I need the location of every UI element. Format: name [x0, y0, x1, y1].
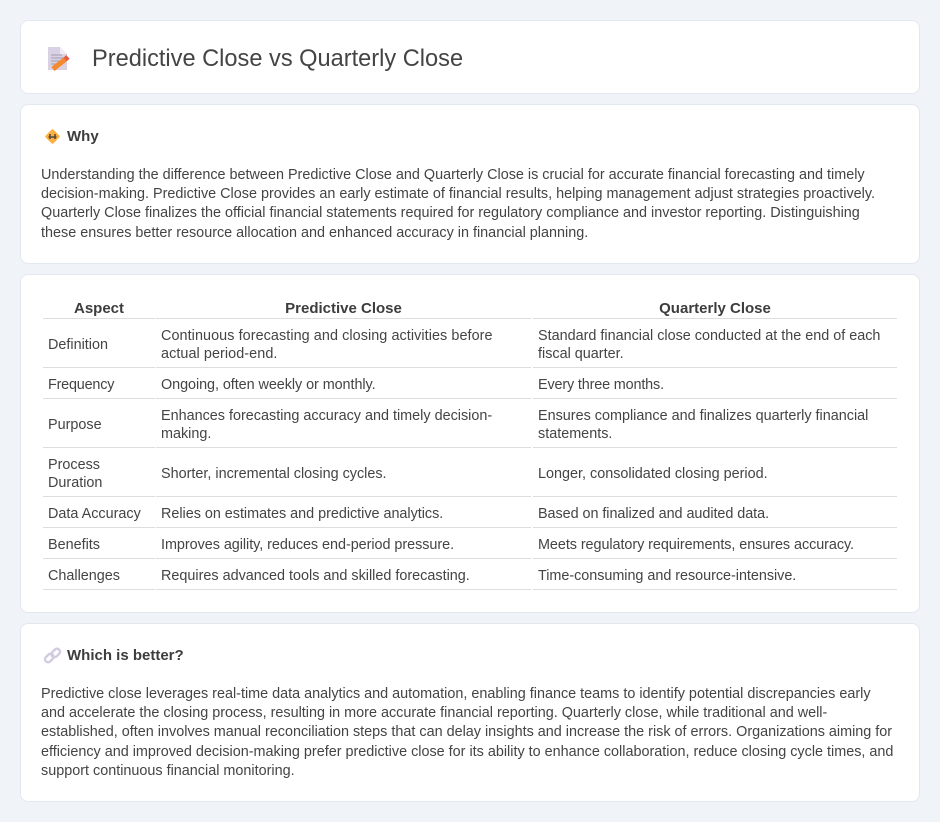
panel: comparison table	[20, 274, 920, 613]
icon: chain link	[44, 648, 62, 664]
panel: why	[20, 104, 920, 264]
row: challenges: Challenges	[48, 568, 120, 584]
table header: Predictive Close	[285, 300, 402, 317]
which is better paragraph: and accelerate the closing process, resulting in more accurate financial reporting. Quarterly close, while traditional and well-	[41, 705, 827, 721]
row: benefits: Meets regulatory requirements, ensures accuracy.	[538, 537, 854, 553]
why paragraph: Understanding the difference between Predictive Close and Quarterly Close is crucial for accurate financial forecasting and timely	[41, 166, 865, 182]
row: definition: Continuous forecasting and closing activities before	[161, 328, 493, 344]
row: data accuracy: Based on finalized and audited data.	[538, 506, 769, 522]
row: challenges: Requires advanced tools and skilled forecasting.	[161, 568, 470, 584]
row: process duration	[48, 457, 768, 491]
row: definition: Definition	[48, 337, 108, 353]
which is better paragraph: support continuous financial monitoring.	[41, 763, 295, 779]
row: frequency: Every three months.	[538, 377, 664, 393]
row: benefits: Benefits	[48, 537, 100, 553]
row: purpose	[48, 408, 868, 442]
row: process duration: Longer, consolidated closing period.	[538, 466, 768, 482]
row: definition: fiscal quarter.	[538, 346, 624, 362]
panel: title header	[20, 20, 920, 94]
which is better paragraph: established, often involves manual reconciliation steps that can delay insights and increase the risk of errors. Organizations aiming for	[41, 724, 892, 740]
why paragraph: Quarterly Close finalizes the official financial statements required for regulatory compliance and investor reporting. Distinguishing	[41, 205, 860, 221]
row: data accuracy: Data Accuracy	[48, 506, 141, 522]
row: definition: actual period-end.	[161, 346, 277, 362]
row: challenges	[48, 568, 796, 584]
which is better paragraph	[41, 686, 893, 779]
row: benefits	[48, 537, 854, 553]
row: frequency	[48, 377, 664, 393]
row: benefits: Improves agility, reduces end-period pressure.	[161, 537, 454, 553]
row: process duration: Process	[48, 457, 100, 473]
table header: Quarterly Close	[659, 300, 771, 317]
row: process duration: Duration	[48, 475, 102, 491]
row: purpose: Purpose	[48, 417, 102, 433]
row: challenges: Time-consuming and resource-intensive.	[538, 568, 796, 584]
why paragraph	[41, 166, 875, 241]
panel: which is better	[20, 623, 920, 802]
heading: which is better: Which is better?	[67, 647, 184, 664]
why paragraph: decision-making. Predictive Close provides an early estimate of financial results, helping management adjust strategies proactively.	[41, 186, 875, 202]
row: process duration: Shorter, incremental closing cycles.	[161, 466, 387, 482]
row: frequency: Ongoing, often weekly or monthly.	[161, 377, 376, 393]
heading: why: Why	[67, 128, 99, 145]
row: purpose: making.	[161, 426, 211, 442]
why paragraph: these ensures better resource allocation and enhanced accuracy in financial planning.	[41, 225, 588, 241]
row: purpose: Enhances forecasting accuracy and timely decision-	[161, 408, 492, 424]
which is better paragraph: Predictive close leverages real-time data analytics and automation, enabling finance teams to identify potential discrepancies early	[41, 686, 871, 702]
title: Predictive Close vs Quarterly Close	[92, 46, 463, 72]
row: frequency: Frequency	[48, 377, 114, 393]
row: purpose: Ensures compliance and finalizes quarterly financial	[538, 408, 868, 424]
row: purpose: statements.	[538, 426, 612, 442]
table header: Aspect	[74, 300, 124, 317]
table header	[74, 300, 771, 317]
icon: road sign	[45, 129, 60, 144]
which is better paragraph: efficiency and improved decision-making prefer predictive close for its ability to enhance collaboration, reduce closing cycle times, and	[41, 744, 893, 760]
row: data accuracy: Relies on estimates and predictive analytics.	[161, 506, 443, 522]
row: data accuracy	[48, 506, 769, 522]
icon: document with pencil	[48, 47, 70, 71]
row: definition: Standard financial close conducted at the end of each	[538, 328, 880, 344]
row: definition	[48, 328, 880, 362]
